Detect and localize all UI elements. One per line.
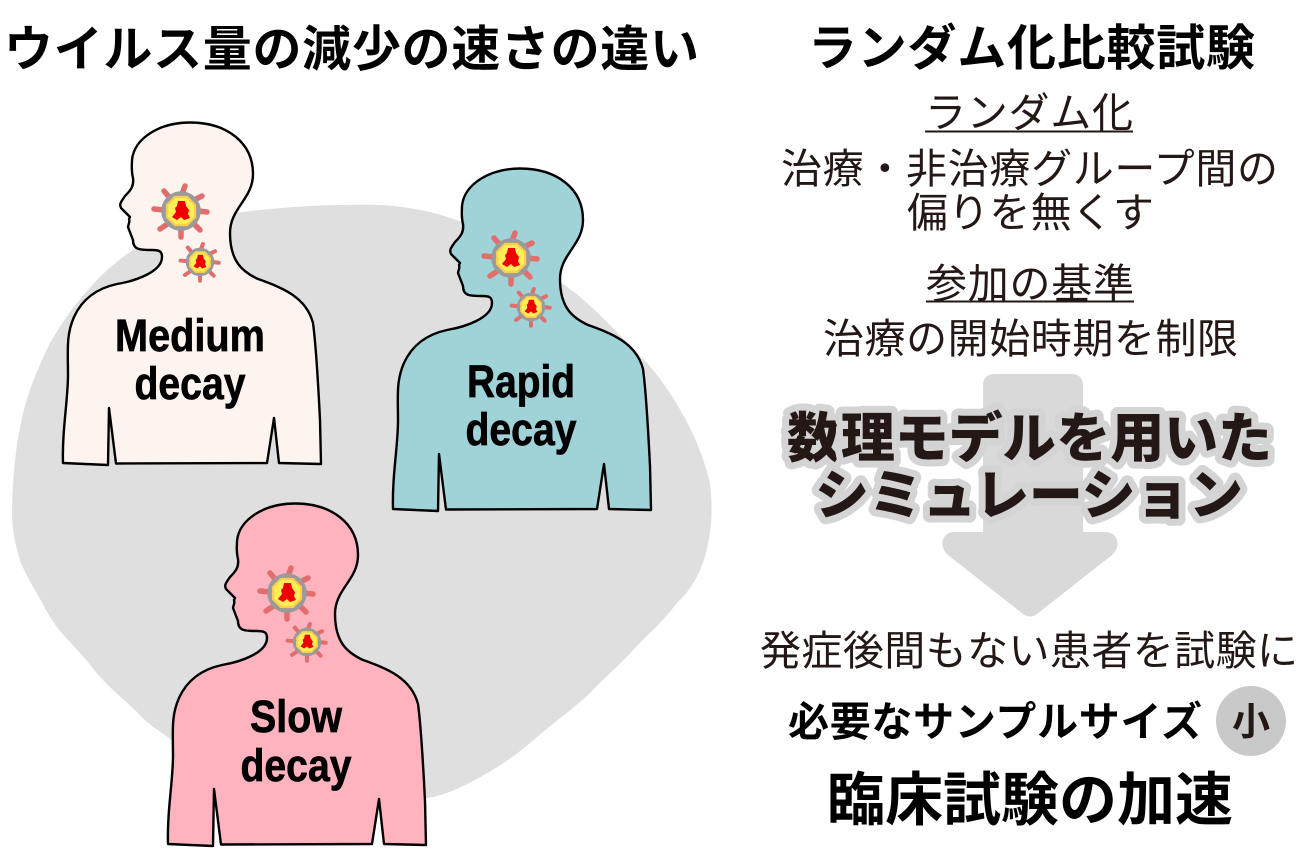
icon: virus large xyxy=(154,186,207,237)
icon: virus small xyxy=(181,244,219,281)
label: rapid: Rapid xyxy=(467,356,575,407)
text: early patients: 発症後間もない患者を試験に xyxy=(760,628,1298,674)
text: simulation line 1: 数理モデルを用いた xyxy=(787,408,1272,469)
arrow xyxy=(942,374,1118,616)
icon: virus small xyxy=(512,289,550,326)
icon: virus small xyxy=(288,624,326,661)
figure: medium decay xyxy=(63,122,321,465)
label: slow: Slow xyxy=(250,691,343,742)
text: accelerate trials: 臨床試験の加速 xyxy=(827,768,1233,833)
background blob xyxy=(12,205,712,798)
title: randomized trial: ランダム化比較試験 xyxy=(808,22,1255,76)
icon: virus large xyxy=(484,233,537,284)
label: decay: decay xyxy=(134,358,246,409)
heading: inclusion criteria: 参加の基準 xyxy=(926,261,1134,307)
figure: slow decay xyxy=(168,504,426,846)
label: decay: decay xyxy=(466,404,576,455)
text: limit treatment start: 治療の開始時期を制限 xyxy=(823,316,1238,362)
heading: randomization: ランダム化 xyxy=(925,90,1133,136)
label: medium decay: Medium xyxy=(115,310,265,361)
badge: small: 小 xyxy=(1232,702,1270,744)
text: sample size: 必要なサンプルサイズ xyxy=(788,699,1202,745)
badge: small xyxy=(1216,686,1286,756)
figure: rapid decay xyxy=(393,168,651,511)
text: remove bias line 2: 偏りを無くす xyxy=(907,190,1154,236)
label: decay: decay xyxy=(240,740,352,791)
icon: virus large xyxy=(260,568,313,619)
text: simulation line 2: シミュレーション xyxy=(815,466,1243,526)
title: viral decay: ウイルス量の減少の速さの違い xyxy=(4,23,699,77)
text: remove bias line 1: 治療・非治療グループ間の xyxy=(781,146,1278,192)
